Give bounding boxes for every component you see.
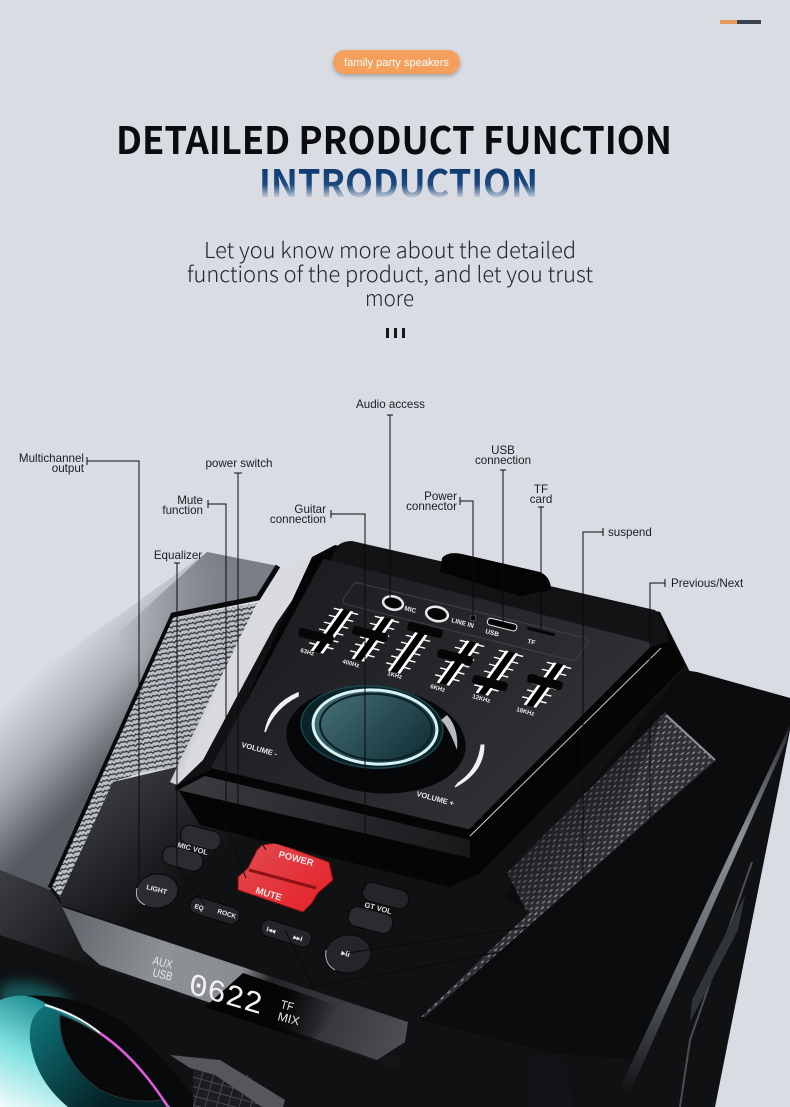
callout: power connector: connector: [406, 500, 457, 513]
lower grille: [170, 1055, 285, 1107]
callout: multichannel output: Multichannel: [19, 452, 84, 465]
callout: power connector: Power: [424, 490, 457, 503]
intro text block: functions of the product, and let you trust: [187, 257, 593, 289]
callout: previous next: [347, 577, 744, 953]
callout: multichannel output: [19, 452, 139, 880]
button: power mute: POWER: [277, 849, 315, 869]
button: eq rock: [188, 895, 241, 926]
panel surface: [215, 562, 648, 826]
callout: audio access: Audio access: [356, 398, 425, 411]
left wing top shade: [100, 552, 278, 700]
top control block base: [176, 545, 685, 887]
grille shade: [507, 712, 665, 912]
lower front facet: [530, 1053, 572, 1107]
display digits: 0622: [187, 968, 264, 1024]
callout: tf card: TF: [534, 483, 548, 496]
callout: previous next: Previous/Next: [671, 577, 744, 590]
slider 18KHz: 18KHz: [515, 707, 535, 718]
intro text block: more: [365, 281, 414, 313]
callout: power switch: [205, 457, 273, 850]
slider 400Hz: 400Hz: [341, 659, 360, 669]
subtitle: introduction: INTRODUCTION: [259, 153, 538, 208]
slider 6KHz: [429, 640, 482, 694]
right side panel trim: [680, 862, 752, 1107]
display black window: [205, 973, 345, 1042]
callout: tf card: card: [530, 493, 552, 506]
callout: guitar connection: connection: [270, 513, 326, 526]
port strip: USB: [484, 628, 500, 639]
callout: suspend: suspend: [608, 526, 652, 539]
button: previous next: I◂◂: [265, 926, 277, 936]
display labels: AUX: [151, 953, 174, 972]
control panel: [215, 562, 648, 826]
callout: usb connection: connection: [475, 454, 531, 467]
button: previous next: ▸▸I: [291, 934, 303, 944]
silver strip: [170, 558, 310, 785]
block highlight: [470, 648, 661, 836]
button: eq rock: EQ: [193, 903, 204, 913]
volume minus arc: [265, 693, 298, 732]
callout: suspend: [285, 526, 652, 987]
block front face: [178, 776, 470, 858]
slider 1KHz: 1KHz: [386, 671, 403, 681]
deck: [60, 767, 530, 1023]
tag pill: family party speakers: family party speakers: [344, 57, 449, 69]
callout: usb connection: [475, 444, 531, 622]
button: previous next: [259, 918, 313, 949]
button: eq rock: ROCK: [216, 908, 237, 921]
speaker body: [0, 560, 790, 1107]
corner accent bar: [720, 20, 761, 24]
callout: usb connection: USB: [491, 444, 515, 457]
port strip: [343, 583, 588, 660]
tag pill: family party speakers: [333, 50, 460, 74]
left wing panel: [0, 552, 278, 890]
button: gt vol down: [346, 905, 395, 936]
lower left facet: [0, 870, 400, 1070]
slider 12KHz: [471, 650, 521, 705]
woofer dark surround: [0, 996, 200, 1107]
slider 63Hz: 63Hz: [299, 648, 315, 658]
grille edge: [667, 716, 715, 760]
woofer pink rim: [100, 1033, 168, 1107]
volume plus arc: [455, 745, 484, 787]
right edge silver strip: [612, 725, 790, 1107]
display band: [62, 907, 408, 1060]
callout: mute function: Mute: [177, 494, 203, 507]
block handle: [330, 541, 668, 648]
callout: mute function: function: [162, 504, 203, 517]
slider 18KHz: [515, 662, 569, 718]
callout: equalizer: Equalizer: [154, 549, 202, 562]
slider 63Hz: [297, 608, 356, 658]
black wing edge: [50, 566, 278, 888]
button: mic vol up: [178, 823, 223, 852]
label: gt vol: GT VOL: [363, 900, 393, 916]
speaker product illustration: [0, 541, 790, 1107]
title: DETAILED PRODUCT FUNCTION: [116, 110, 672, 165]
intro text block: [187, 233, 593, 313]
volume knob: [281, 678, 471, 802]
port strip: MIC: [403, 605, 417, 615]
button: play pause: ▸II: [340, 948, 351, 959]
slider 6KHz: 6KHz: [429, 684, 446, 694]
slider 400Hz: [341, 616, 397, 669]
right top face: [420, 670, 790, 1060]
callout: power switch: power switch: [205, 457, 273, 470]
woofer cone: [60, 1015, 168, 1107]
button: power mute: MUTE: [254, 885, 283, 904]
label: volume minus: VOLUME -: [240, 740, 279, 759]
display labels: TF: [279, 997, 295, 1014]
button: play pause: [323, 932, 373, 976]
label: volume plus: VOLUME +: [415, 789, 456, 808]
port strip: LINE IN: [450, 617, 475, 630]
button: light: LIGHT: [145, 884, 168, 897]
right mesh grille: [418, 712, 716, 1017]
display labels: MIX: [276, 1009, 301, 1028]
display labels: [151, 953, 301, 1028]
port strip: TF: [526, 638, 536, 647]
button: light: [134, 871, 180, 911]
callout: multichannel output: output: [52, 462, 85, 475]
display labels: USB: [151, 965, 174, 984]
left speaker mesh: [52, 603, 257, 897]
woofer: [0, 982, 200, 1107]
label: mic vol: MIC VOL: [176, 840, 209, 857]
callout: mute function: [162, 494, 246, 878]
three bar ornament: [386, 328, 405, 338]
callout: tf card: [530, 483, 552, 632]
callout: guitar connection: Guitar: [294, 503, 326, 516]
intro text block: Let you know more about the detailed: [204, 233, 576, 265]
slider 12KHz: 12KHz: [471, 694, 491, 705]
callout: power connector: [406, 490, 473, 616]
callout: guitar connection: [270, 503, 365, 890]
right side panel inset: [690, 895, 745, 1022]
slider 1KHz: [385, 621, 444, 681]
handle bump: [440, 553, 551, 596]
woofer ring: [0, 996, 170, 1107]
button: power mute: [238, 843, 333, 912]
woofer inner ring: [30, 1006, 168, 1107]
woofer glow: [0, 982, 70, 1015]
callout: equalizer: [154, 549, 205, 905]
callout: audio access: [356, 398, 425, 600]
button: mic vol down: [160, 844, 205, 873]
woofer white rim: [45, 1005, 100, 1033]
button: gt vol up: [360, 880, 411, 911]
callouts: [19, 398, 744, 987]
